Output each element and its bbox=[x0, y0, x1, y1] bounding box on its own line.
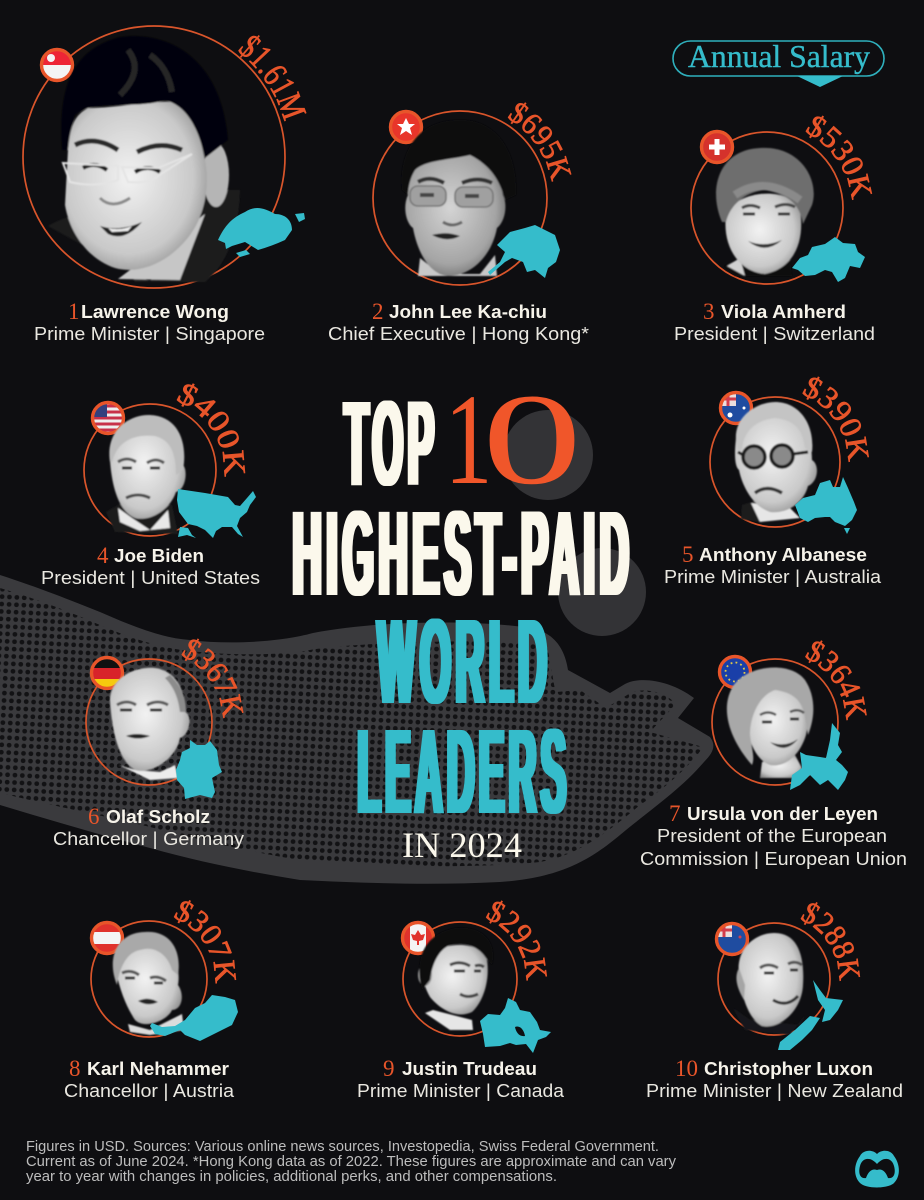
leader 2: John Lee Ka-chiu: $695K bbox=[508, 102, 572, 182]
annual salary badge: Annual Salary bbox=[688, 38, 870, 74]
leader 5: Anthony Albanese bbox=[664, 376, 882, 587]
leader 4: Joe Biden: President | United States bbox=[41, 567, 260, 588]
leader 6: Olaf Scholz: Chancellor | Germany bbox=[53, 828, 245, 849]
leader 7: Ursula von der Leyen: $364K bbox=[805, 640, 867, 720]
leader 2: John Lee Ka-chiu: Chief Executive | Hong Kong* bbox=[328, 323, 589, 344]
leader 3: Viola Amherd: Viola Amherd bbox=[721, 302, 846, 322]
leader 9: Justin Trudeau: 9 bbox=[383, 1056, 394, 1081]
leader 2: John Lee Ka-chiu bbox=[328, 102, 589, 344]
footnote bbox=[26, 1138, 676, 1185]
leader 8: Karl Nehammer: 8 bbox=[69, 1056, 80, 1081]
leader 10: Christopher Luxon: Prime Minister | New Zealand bbox=[646, 1080, 903, 1101]
leader 8: Karl Nehammer: Karl Nehammer bbox=[87, 1059, 229, 1079]
leader 5: Anthony Albanese: 5 bbox=[682, 542, 694, 567]
leader 6: Olaf Scholz: 6 bbox=[88, 804, 100, 829]
leader 10: Christopher Luxon: $288K bbox=[800, 902, 860, 982]
title: IN 2024 bbox=[402, 825, 522, 865]
leader 9: Justin Trudeau: Prime Minister | Canada bbox=[357, 1080, 565, 1101]
leader 7: Ursula von der Leyen: 7 bbox=[669, 801, 680, 826]
leader 1: Lawrence Wong: Prime Minister | Singapore bbox=[34, 323, 265, 344]
leader 7: Ursula von der Leyen: Commission | European Union bbox=[640, 848, 907, 869]
leader 5: Anthony Albanese: Prime Minister | Australia bbox=[664, 566, 882, 587]
leader 6: Olaf Scholz: $367K bbox=[182, 638, 244, 718]
leader 4: Joe Biden bbox=[41, 383, 260, 588]
leader 6: Olaf Scholz bbox=[53, 638, 245, 849]
leader 2: John Lee Ka-chiu: 2 bbox=[372, 299, 384, 324]
leader 3: Viola Amherd: 3 bbox=[703, 299, 714, 324]
footnote: year to year with changes in policies, additional perks, and other compensations. bbox=[26, 1168, 557, 1185]
footnote: Figures in USD. Sources: Various online news sources, Investopedia, Swiss Federal Government. bbox=[26, 1138, 659, 1155]
leader 8: Karl Nehammer bbox=[64, 900, 238, 1101]
halftone hand illustration bbox=[0, 575, 713, 884]
coins behind title bbox=[503, 410, 646, 636]
leader 3: Viola Amherd: $530K bbox=[806, 116, 872, 200]
leader 1: Lawrence Wong bbox=[22, 25, 306, 344]
leader 4: Joe Biden: $400K bbox=[176, 383, 246, 477]
leader 8: Karl Nehammer: $307K bbox=[174, 900, 236, 984]
title: 1 bbox=[444, 368, 492, 512]
leader 9: Justin Trudeau bbox=[357, 900, 565, 1101]
leader 5: Anthony Albanese: $390K bbox=[802, 376, 869, 462]
text: WORLD bbox=[378, 593, 552, 729]
leader 8: Karl Nehammer: Chancellor | Austria bbox=[64, 1080, 235, 1101]
leader 3: Viola Amherd: President | Switzerland bbox=[674, 323, 875, 344]
leader 6: Olaf Scholz: Olaf Scholz bbox=[106, 807, 210, 827]
leader 7: Ursula von der Leyen: Ursula von der Leyen bbox=[687, 804, 878, 824]
leader 3: Viola Amherd bbox=[674, 116, 875, 344]
leader 2: John Lee Ka-chiu: John Lee Ka-chiu bbox=[389, 302, 547, 322]
leader 10: Christopher Luxon bbox=[646, 902, 903, 1101]
leader 4: Joe Biden: Joe Biden bbox=[114, 546, 204, 566]
leader 10: Christopher Luxon: 10 bbox=[675, 1056, 698, 1081]
leader 7: Ursula von der Leyen: President of the European bbox=[657, 825, 887, 846]
title: 0 bbox=[482, 368, 582, 512]
leader 9: Justin Trudeau: $292K bbox=[486, 900, 548, 981]
logo bbox=[855, 1151, 899, 1188]
leader 4: Joe Biden: 4 bbox=[97, 543, 109, 568]
footnote: Current as of June 2024. *Hong Kong data as of 2022. These figures are approximate and can vary bbox=[26, 1153, 676, 1170]
leader 9: Justin Trudeau: Justin Trudeau bbox=[402, 1059, 537, 1079]
leader 7: Ursula von der Leyen bbox=[640, 640, 907, 869]
leader 10: Christopher Luxon: Christopher Luxon bbox=[704, 1059, 873, 1079]
annual salary badge bbox=[673, 38, 884, 87]
title: TOP bbox=[344, 375, 438, 511]
leader 1: Lawrence Wong: 1 bbox=[68, 299, 80, 324]
leader 1: Lawrence Wong: Lawrence Wong bbox=[81, 302, 229, 322]
title bbox=[292, 368, 634, 865]
leader 5: Anthony Albanese: Anthony Albanese bbox=[699, 545, 867, 565]
leader 1: Lawrence Wong: $1.61M bbox=[238, 35, 306, 122]
